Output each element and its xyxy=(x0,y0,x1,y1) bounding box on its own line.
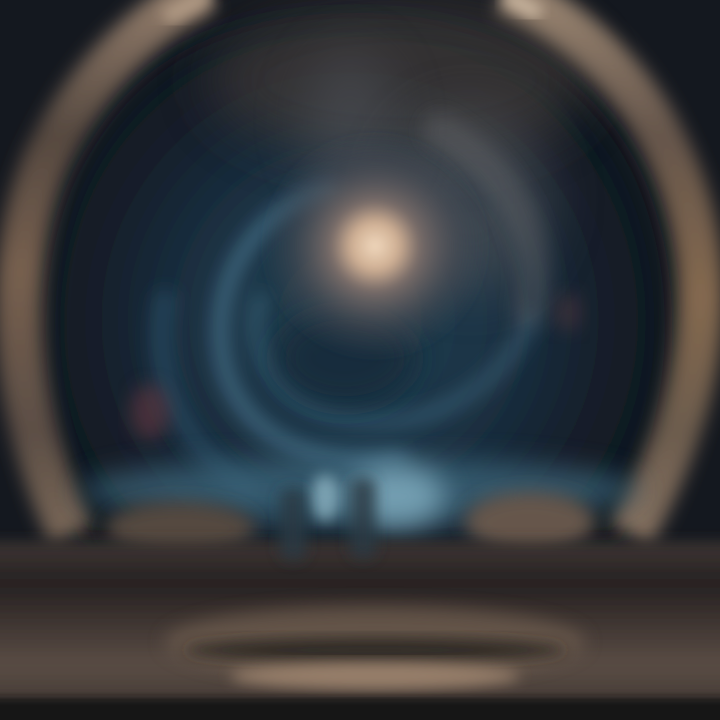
floor: bottom shadow xyxy=(0,698,720,720)
floor platform xyxy=(0,542,720,720)
ring highlight: top left xyxy=(165,0,210,18)
grey cloud around galaxy arm xyxy=(390,110,550,290)
portal ring xyxy=(19,0,701,535)
grey cloud top xyxy=(305,50,395,190)
red nebula spots xyxy=(130,292,582,440)
floor: outer stepped ellipse xyxy=(165,606,585,678)
galaxy: glowing core xyxy=(260,131,490,361)
figure: left xyxy=(280,488,306,560)
ring: left arc xyxy=(19,0,205,535)
silhouetted figures xyxy=(280,478,376,560)
galaxy: dark centre below core xyxy=(275,310,415,406)
galaxy: spiral arms xyxy=(161,130,533,490)
floor: lit centre step xyxy=(230,663,520,689)
portal interior sky xyxy=(42,0,672,540)
ring highlight: top right xyxy=(505,0,540,14)
floor: dark groove xyxy=(185,638,565,662)
mounds on horizon xyxy=(105,492,595,554)
warm haze above galaxy xyxy=(210,0,590,160)
blue horizon glow xyxy=(80,458,640,529)
figure: right xyxy=(350,478,376,558)
galaxy xyxy=(161,130,533,490)
ring: right arc xyxy=(505,0,701,535)
